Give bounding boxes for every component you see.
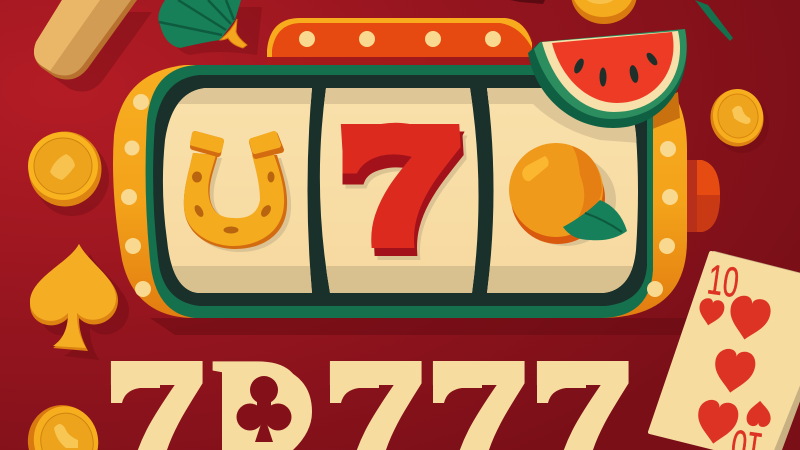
- coin: left: [28, 132, 109, 216]
- title flag serifs: [111, 362, 586, 403]
- title letter bowl: [222, 362, 312, 450]
- title 7P777: [104, 319, 636, 450]
- leaf stem top right: [695, 0, 733, 41]
- lever knob: [687, 160, 720, 232]
- dark frame: [153, 75, 647, 306]
- seven tan shadow: 7: [340, 104, 480, 293]
- coin: bottom left: [20, 397, 106, 450]
- symbol: horseshoe: [184, 134, 291, 252]
- marquee dots: right: [647, 141, 678, 297]
- seven face: 7: [334, 92, 474, 281]
- watermelon: [528, 29, 687, 128]
- seven dark extrusion: 7: [337, 100, 477, 289]
- spade: [30, 244, 129, 360]
- club cutout in title: [236, 376, 292, 442]
- playing card: [650, 253, 800, 450]
- card text: 10: [705, 256, 742, 307]
- symbol: orange: [509, 143, 616, 246]
- coin: top: [571, 0, 637, 24]
- gold shadow under melon: [648, 92, 680, 130]
- symbol: red seven: [334, 92, 480, 293]
- baton top left: [34, 0, 152, 92]
- machine shadow: [150, 250, 730, 335]
- slot machine: [113, 65, 730, 335]
- symbol: orange leaf: [563, 200, 627, 240]
- dark object at top: [510, 0, 545, 4]
- marquee top: [267, 18, 535, 65]
- fan top: [158, 0, 262, 55]
- reels: [150, 84, 650, 296]
- card hearts: [693, 293, 773, 447]
- green frame: [146, 65, 653, 318]
- gold body: [113, 65, 687, 318]
- coin: right: [706, 85, 769, 153]
- marquee dots: left: [121, 94, 151, 297]
- title characters: [104, 319, 636, 450]
